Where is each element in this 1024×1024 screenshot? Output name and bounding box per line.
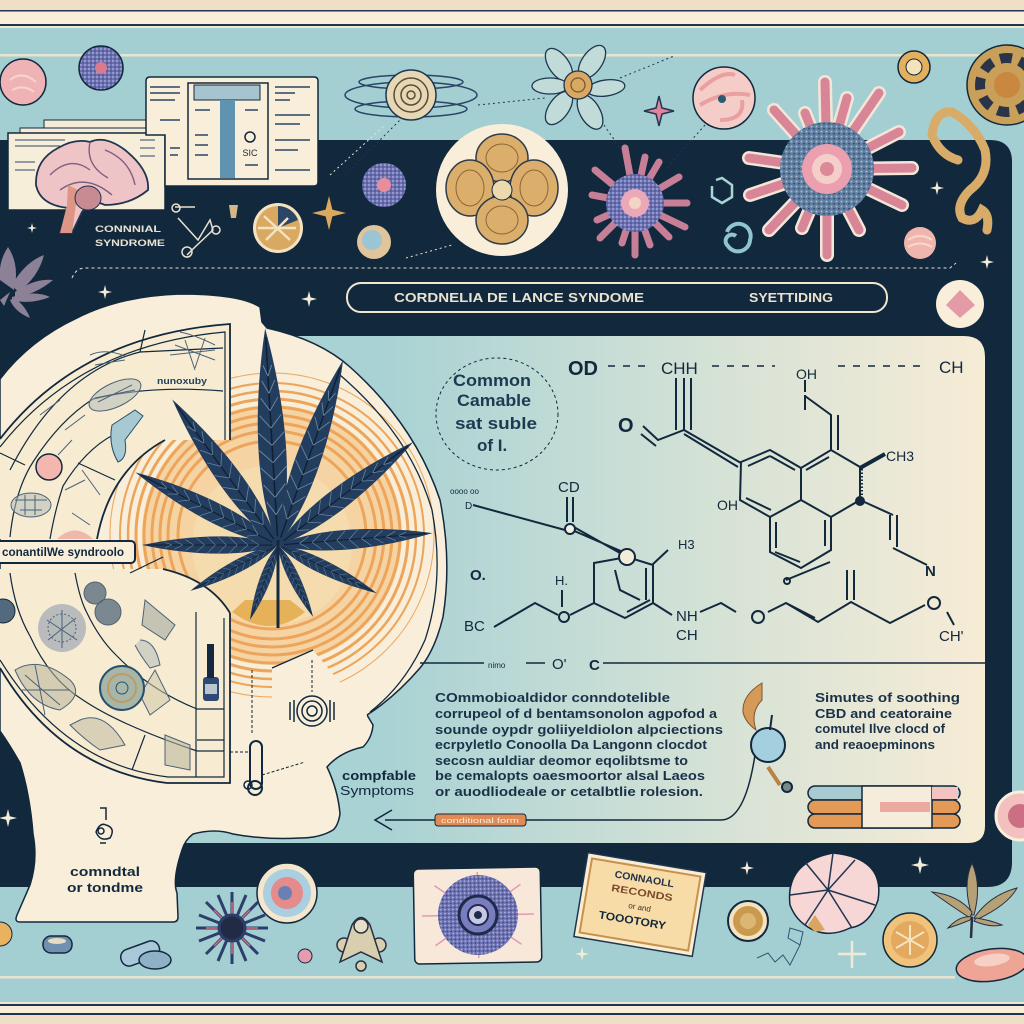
icon: olive leaf xyxy=(932,863,1017,938)
body paragraph: sounde oypdr goliiyeldiolon alpciections xyxy=(435,722,723,737)
icon: pink pill xyxy=(904,227,936,259)
divider with labels xyxy=(420,656,985,674)
brain caption: CONNNIAL xyxy=(95,224,162,234)
card: certificate: CONNAOLL xyxy=(614,869,675,890)
arrow with tag: conditional form xyxy=(441,816,519,825)
icon: small molecule xyxy=(172,204,220,257)
chemical labels: H. xyxy=(555,573,568,588)
icon: figure xyxy=(337,918,386,971)
body paragraph: be cemalopts oaesmoortor alsal Laeos xyxy=(435,768,705,783)
icon: pill xyxy=(43,936,72,953)
dashed common circle: Camable xyxy=(457,391,531,410)
chemical labels: H3 xyxy=(678,537,695,552)
chemical structure bottom left xyxy=(473,497,790,627)
head silhouette xyxy=(0,294,447,922)
icon: brain xyxy=(36,140,148,233)
chemical labels: D xyxy=(465,501,472,512)
icon: mosaic disc xyxy=(967,45,1024,125)
wheel text: nunoxuby xyxy=(157,376,207,386)
wheel sketches xyxy=(11,332,215,770)
icon: pills xyxy=(118,939,171,969)
icon: gold star xyxy=(312,196,346,230)
chemical labels: OD xyxy=(568,358,598,380)
icon: flask and feather xyxy=(743,683,792,792)
chemical labels: CH' xyxy=(939,628,964,645)
icon: right pink disc xyxy=(996,792,1024,840)
side text: comutel Ilve clocd of xyxy=(815,721,946,736)
icon: worm xyxy=(932,112,988,230)
chemical labels: OH xyxy=(796,366,817,382)
icon: big virus xyxy=(749,82,912,255)
side text: Simutes of soothing xyxy=(815,690,960,705)
navy band xyxy=(0,140,1012,887)
body paragraph: COmmobioaldidor conndotelible xyxy=(435,690,670,705)
sparkles xyxy=(0,181,994,827)
bottom sparkles xyxy=(575,856,929,961)
chemical labels: NH xyxy=(676,608,698,625)
card: certificate: or and xyxy=(628,901,652,914)
body paragraph: ecrpyletlo Conoolla Da Langonn clocdot xyxy=(435,737,708,752)
icon: hexagon xyxy=(712,178,732,203)
top border xyxy=(0,0,1024,28)
wheel icon: blue vial xyxy=(111,410,143,462)
wheel icon: oil bottle xyxy=(203,644,219,701)
stacked bars xyxy=(808,786,960,828)
icon: urchin xyxy=(196,892,268,964)
title pill: SYETTIDING xyxy=(749,290,833,305)
dashed links on navy xyxy=(330,125,452,258)
label: wheel bar xyxy=(0,541,135,563)
symptoms caption: Symptoms xyxy=(340,783,415,798)
divider with labels: C xyxy=(589,657,600,674)
icon: pink shell xyxy=(790,853,879,933)
icon: blue curl xyxy=(726,224,751,251)
card: certificate xyxy=(574,853,706,956)
dashed common circle xyxy=(436,358,558,470)
divider with labels: nimo xyxy=(488,661,506,670)
thin top rule xyxy=(0,54,1024,56)
document xyxy=(146,77,318,186)
thin bottom rule xyxy=(0,976,955,978)
chemical labels: oooo oo xyxy=(450,487,479,496)
dotted links xyxy=(345,56,705,175)
bottom row xyxy=(0,853,1024,986)
icon: pink disc xyxy=(693,67,755,129)
icon: star xyxy=(644,96,674,126)
dashed common circle: sat suble xyxy=(455,414,537,433)
head caption: or tondme xyxy=(67,880,143,895)
icon: spiral cell with orbits xyxy=(345,70,477,120)
icon: pink cell xyxy=(0,59,46,105)
icon: purple cell xyxy=(79,46,123,90)
chemical labels: N xyxy=(925,563,936,580)
head inner contour xyxy=(272,375,437,712)
icon: left leaf xyxy=(0,247,53,318)
panel: chemistry and text xyxy=(150,336,985,843)
icon: gold disc xyxy=(728,901,768,941)
icon: swirl cell xyxy=(257,863,317,923)
icon: gold disc xyxy=(898,51,930,83)
chemical structure top xyxy=(608,366,954,625)
chemical labels: O xyxy=(618,415,634,437)
stack of papers xyxy=(8,120,165,210)
chemical labels: BC xyxy=(464,618,485,635)
chemical labels: CD xyxy=(558,479,580,496)
dashed trail xyxy=(72,263,956,278)
dashed common circle: Common xyxy=(453,371,531,390)
icon: blue cell xyxy=(357,225,391,259)
title pill xyxy=(347,283,887,312)
divider with labels: O' xyxy=(552,656,567,673)
chemical labels: CHH xyxy=(661,359,698,378)
wheel icon: pink dome xyxy=(57,530,93,539)
chemical labels: OH xyxy=(717,497,738,513)
card: certificate: TOOOTORY xyxy=(598,909,667,933)
chemical labels: O. xyxy=(470,567,486,584)
brain caption: SYNDROME xyxy=(95,238,165,248)
wheel icon: blue disc xyxy=(0,599,15,623)
icon: molecule xyxy=(757,928,803,965)
arrow with tag xyxy=(375,755,755,830)
icon: flower disc xyxy=(936,280,984,328)
title pill: CORDNELIA DE LANCE SYNDOME xyxy=(394,290,644,305)
big flower circle xyxy=(436,124,568,256)
navy area icons xyxy=(0,163,994,827)
icon: small virus xyxy=(592,148,687,255)
symptoms caption: compfable xyxy=(342,768,416,783)
chemical labels xyxy=(450,358,964,645)
document: SIC xyxy=(242,148,258,158)
icon: pink slice xyxy=(954,944,1024,986)
body paragraph: secosn auldiar deomor eqolibtsme to xyxy=(435,753,688,768)
card: certificate: RECONDS xyxy=(610,883,674,904)
wheel icon: pink dot xyxy=(36,454,62,480)
top circles xyxy=(0,41,1024,175)
bottom border xyxy=(0,1002,1024,1024)
dashed common circle: of I. xyxy=(477,436,507,455)
head caption: comndtal xyxy=(70,864,140,879)
panel: symptom wheel xyxy=(0,324,230,783)
icon: outline flower xyxy=(532,41,626,133)
label: wheel bar: conantilWe syndroolo xyxy=(2,545,124,559)
body paragraph: or auodliodeale or cetalbtlie rolesion. xyxy=(435,784,703,799)
card: purple burst xyxy=(413,867,542,964)
orange rings xyxy=(110,373,434,697)
side text: and reaoepminons xyxy=(815,737,935,752)
head nose area xyxy=(226,650,367,745)
body paragraph: corrupeol of d bentamsonolon agpofod a xyxy=(435,706,718,721)
chemical labels: CH xyxy=(939,358,964,377)
icon: gold seed disc xyxy=(883,913,937,967)
icon: orange edge disc xyxy=(0,922,12,946)
side text: CBD and ceatoraine xyxy=(815,706,952,721)
icon: sparkle cross xyxy=(838,941,866,968)
icon: tan tag xyxy=(229,205,238,218)
icon: purple cell xyxy=(362,163,406,207)
chemical labels: CH3 xyxy=(886,448,914,464)
wheel icon: spiral seed xyxy=(100,666,144,710)
cannabis leaf xyxy=(131,328,433,628)
icon: small pink dot xyxy=(298,949,312,963)
head icons and leaders xyxy=(96,660,334,843)
chemical labels: CH xyxy=(676,627,698,644)
icon: gold cell xyxy=(253,203,303,253)
